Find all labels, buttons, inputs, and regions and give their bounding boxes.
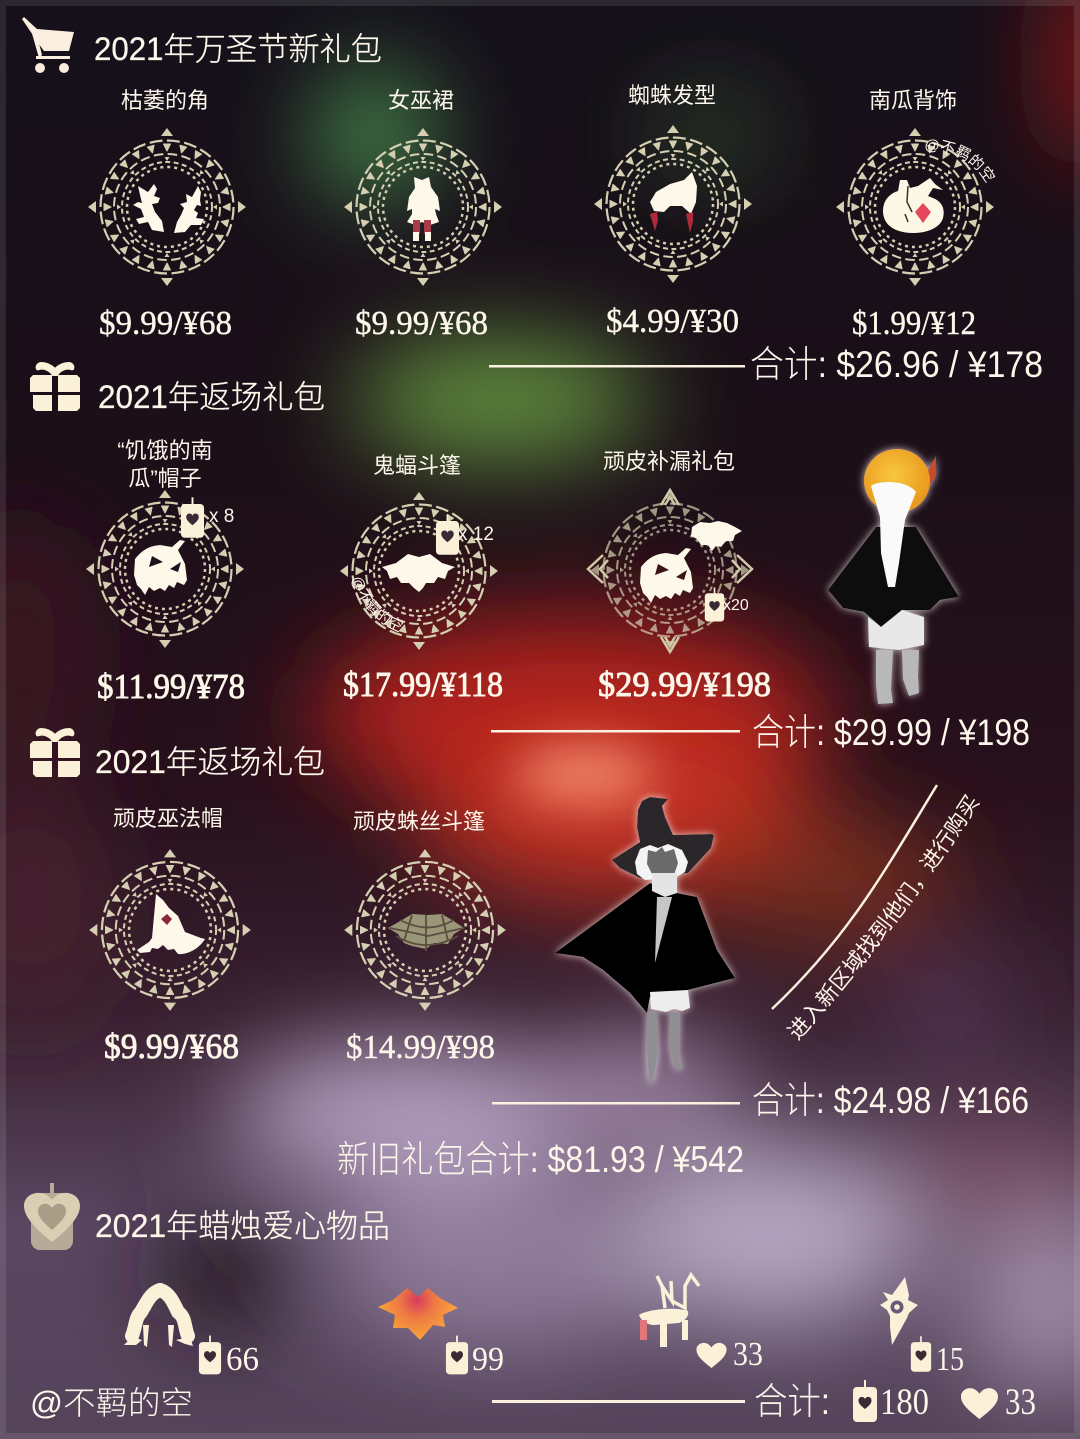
item: mischief witch hat: 顽皮巫法帽: [113, 806, 223, 831]
item: withered horns: $9.99/¥68: [99, 305, 232, 342]
icon: gift: [30, 363, 80, 411]
item: horned chair: [639, 1275, 763, 1373]
total 4: 合计:: [754, 1381, 830, 1422]
grand total: 新旧礼包合计: $81.93 / ¥542: [337, 1139, 744, 1180]
item: bat cape: $17.99/¥118: [343, 665, 503, 704]
heading: 2021年蜡烛爱心物品: [95, 1208, 390, 1244]
total 4: [492, 1380, 1036, 1423]
watermark: @不羁的空: [926, 140, 996, 183]
diagonal divider: [772, 785, 937, 1009]
icon: chevrons: [588, 490, 752, 652]
item: long wavy hair: [124, 1290, 259, 1378]
item: withered horns: [88, 88, 246, 342]
total 2: 合计: $29.99 / ¥198: [752, 712, 1030, 753]
icon: dress: [407, 177, 440, 241]
section 3: returning packs 2: [30, 728, 1029, 1180]
item: pumpkin back accessory: 南瓜背饰: [869, 88, 957, 113]
icon: bat cape small: [691, 521, 742, 551]
icon: web cape: [388, 914, 464, 951]
total 4: 33: [1005, 1382, 1036, 1423]
item: hungry pumpkin hat: $11.99/¥78: [97, 667, 245, 706]
item: hungry pumpkin hat: x 8: [209, 506, 234, 527]
item: mischief catch-up pack: [588, 449, 771, 704]
item: hungry pumpkin hat: 瓜”帽子: [128, 466, 202, 491]
item: mischief catch-up pack: x20: [723, 597, 749, 614]
item: maple leaf cape: [378, 1288, 504, 1378]
heading: 2021年返场礼包: [98, 379, 325, 415]
item: spider-silk cape: 顽皮蛛丝斗篷: [353, 809, 485, 834]
icon: witch hat: [137, 894, 205, 954]
figure: witch hat character: [555, 797, 735, 1083]
item: hungry pumpkin hat: [86, 438, 245, 706]
watermark: @不羁的空: [352, 578, 404, 632]
section 2: returning packs: [30, 362, 1030, 753]
item: horned chair: 33: [733, 1336, 763, 1373]
item: spider hair: [594, 83, 752, 340]
item: spider-silk cape: [344, 809, 506, 1066]
item: mischief witch hat: [89, 806, 251, 1066]
item: pumpkin back accessory: [836, 88, 996, 342]
item: long wavy hair: 66: [226, 1341, 259, 1378]
credit: @不羁的空: [30, 1385, 193, 1421]
item: witch dress: 女巫裙: [388, 88, 454, 113]
item: star ornament: 15: [936, 1341, 964, 1378]
figure: pumpkin bat character: [828, 449, 959, 704]
icon: pumpkin hat: [134, 540, 187, 595]
item: hungry pumpkin hat: “饥饿的南: [117, 438, 213, 463]
item: bat cape: 鬼蝠斗篷: [373, 453, 461, 478]
item: maple leaf cape: 99: [472, 1341, 504, 1378]
item: mischief witch hat: $9.99/¥68: [104, 1027, 239, 1066]
note: go to new area to buy: 进入新区域找到他们，进行购买: [786, 794, 980, 1041]
icon: bat cape: [382, 554, 455, 592]
item: mischief catch-up pack: $29.99/¥198: [598, 665, 771, 704]
total 1: 合计: $26.96 / ¥178: [750, 344, 1043, 385]
icon: horns: [133, 184, 204, 233]
item: spider hair: 蜘蛛发型: [628, 83, 716, 108]
icon: shopping cart: [22, 17, 74, 73]
icon: pumpkin: [883, 178, 944, 233]
item: star ornament: [880, 1277, 964, 1378]
icon: gift: [30, 729, 80, 777]
item: spider hair: $4.99/¥30: [606, 303, 739, 340]
icon: candle with heart: [24, 1183, 80, 1250]
heading: 2021年返场礼包: [95, 744, 325, 780]
section 4: candle and heart items: [24, 1183, 1036, 1423]
item: withered horns: 枯萎的角: [121, 88, 209, 113]
total 4: 180: [880, 1382, 929, 1423]
icon: pumpkin hat small: [640, 548, 693, 603]
item: mischief catch-up pack: 顽皮补漏礼包: [603, 449, 735, 474]
icon: hair: [650, 172, 697, 233]
item: spider-silk cape: $14.99/¥98: [346, 1029, 495, 1066]
item: pumpkin back accessory: $1.99/¥12: [852, 305, 976, 342]
item: bat cape: [340, 453, 503, 704]
item: bat cape: x 12: [458, 524, 494, 545]
heading: new Halloween pack: 2021年万圣节新礼包: [94, 31, 382, 67]
item: witch dress: [344, 88, 502, 342]
total 3: 合计: $24.98 / ¥166: [752, 1080, 1029, 1121]
section 1: Halloween new packs: [22, 17, 1043, 385]
item: witch dress: $9.99/¥68: [355, 305, 488, 342]
